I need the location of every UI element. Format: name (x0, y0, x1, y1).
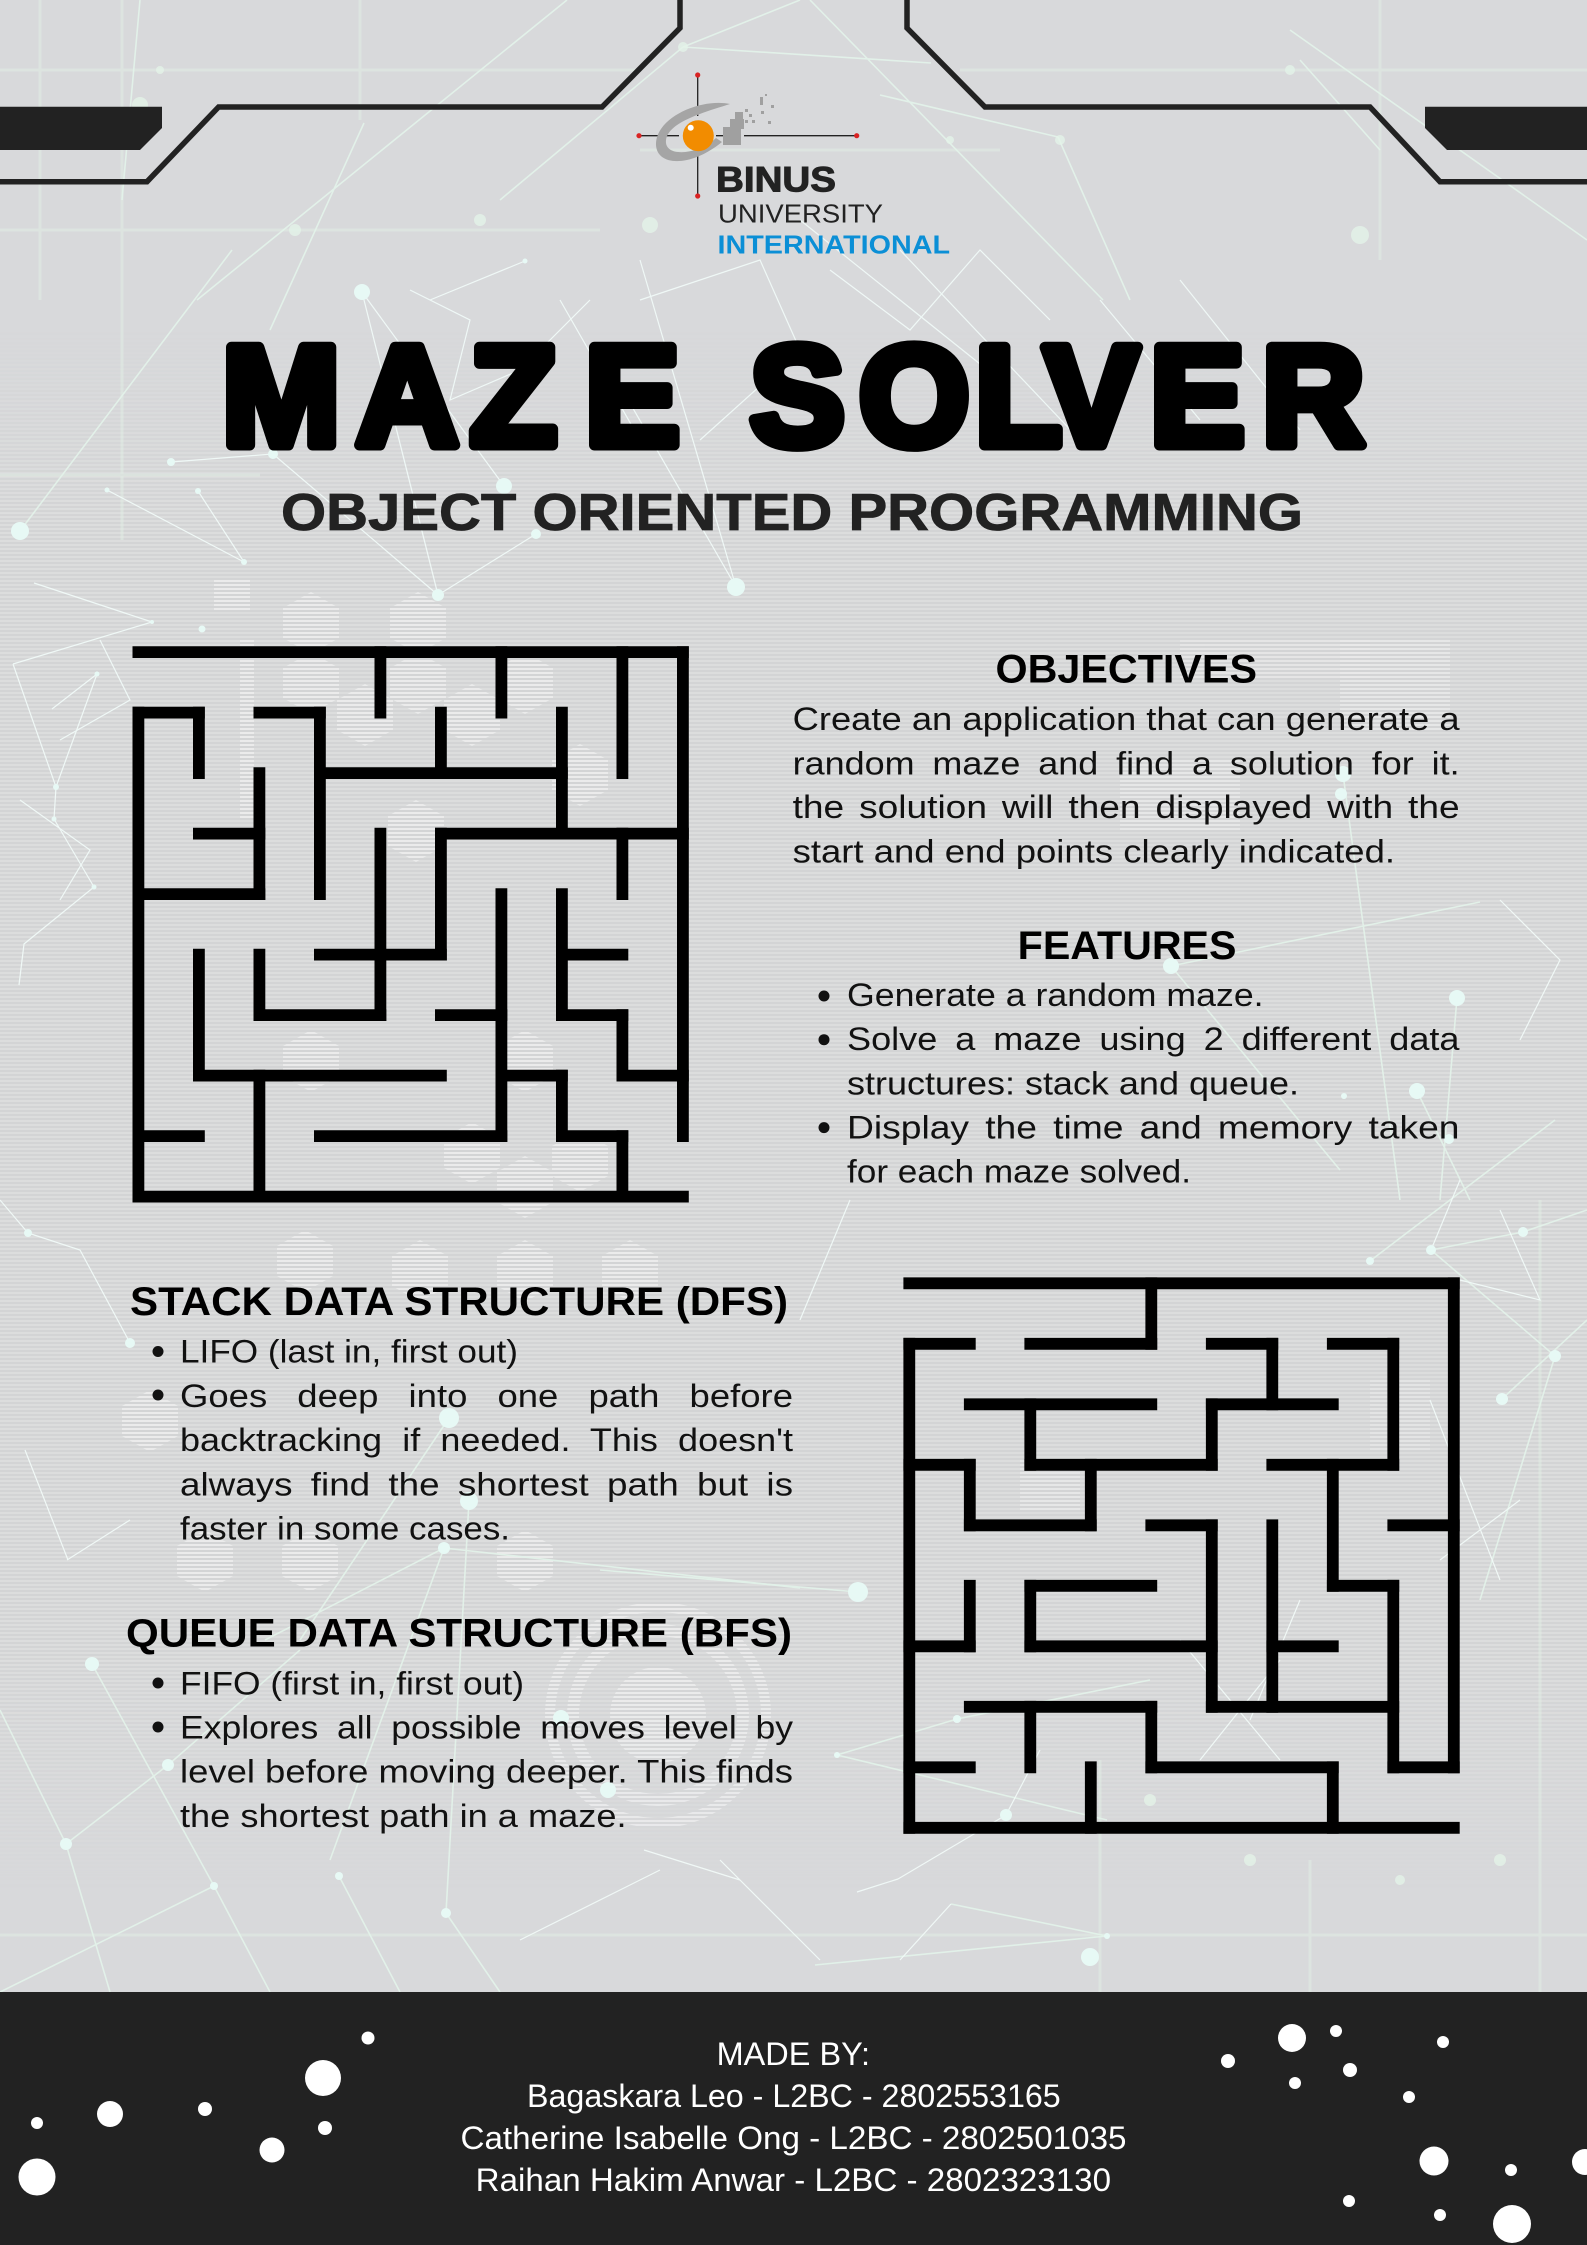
text block: objectives: start and end points clearly indicated. (793, 834, 1395, 870)
maze 2 (909, 1283, 1454, 1828)
top frame: right block (1425, 107, 1587, 150)
heading: objectives: OBJECTIVES (996, 648, 1257, 692)
logo text: BINUS (716, 161, 836, 200)
logo emblem (636, 72, 859, 199)
bullet list: stack (152, 1334, 793, 1546)
credits: Catherine Isabelle Ong - L2BC - 2802501035 (460, 2120, 1126, 2156)
bullet list: stack: always find the shortest path but is (180, 1466, 793, 1502)
maze 1 (138, 652, 683, 1197)
bullet list: stack: faster in some cases. (180, 1510, 510, 1546)
bullet list: queue: the shortest path in a maze. (180, 1798, 626, 1834)
footer dots: right (1221, 2024, 1587, 2243)
bullet list: features: structures: stack and queue. (847, 1066, 1299, 1102)
bullet list: features: Display the time and memory taken (847, 1110, 1460, 1146)
heading: stack: STACK DATA STRUCTURE (DFS) (130, 1280, 788, 1324)
text block: objectives: Create an application that can generate a (793, 701, 1460, 737)
subtitle: OBJECT ORIENTED PROGRAMMING (281, 484, 1303, 542)
bullet list: stack: LIFO (last in, first out) (180, 1334, 518, 1370)
bullet list: features: for each maze solved. (847, 1154, 1191, 1190)
logo: BINUS University International (636, 72, 950, 259)
logo text (716, 161, 950, 259)
bullet list: queue: Explores all possible moves level by (180, 1710, 793, 1746)
top frame: circuit lines (0, 0, 1587, 182)
credits: Raihan Hakim Anwar - L2BC - 2802323130 (476, 2162, 1111, 2198)
network nodes (11, 258, 1561, 1966)
panel: objectives (793, 648, 1460, 870)
logo text: UNIVERSITY (718, 199, 883, 229)
logo text: INTERNATIONAL (718, 229, 950, 259)
text block: objectives: the solution will then displayed with the (793, 789, 1460, 825)
top frame: left block (0, 107, 162, 150)
heading: features: FEATURES (1018, 924, 1236, 968)
title: MAZE SOLVER (222, 317, 1365, 476)
bullet list: features: Solve a maze using 2 different data (847, 1021, 1460, 1057)
bullet list: features (818, 977, 1460, 1190)
text block: objectives (793, 701, 1460, 870)
panel: features (818, 924, 1460, 1190)
text block: objectives: random maze and find a solution for it. (793, 746, 1460, 782)
credits (460, 2036, 1126, 2198)
bullet list: stack: Goes deep into one path before (180, 1378, 793, 1414)
bullet list: stack: backtracking if needed. This doesn't (180, 1422, 793, 1458)
panel: queue data structure (126, 1612, 793, 1834)
bullet list: queue: level before moving deeper. This finds (180, 1754, 793, 1790)
footer band (0, 1992, 1587, 2245)
bullet list: queue: FIFO (first in, first out) (180, 1666, 524, 1702)
footer dots: left (18, 2032, 374, 2196)
bullet list: features: Generate a random maze. (847, 977, 1264, 1013)
credits: MADE BY: (717, 2036, 870, 2072)
heading: queue: QUEUE DATA STRUCTURE (BFS) (126, 1612, 792, 1656)
credits: Bagaskara Leo - L2BC - 2802553165 (527, 2078, 1061, 2114)
panel: stack data structure (130, 1280, 793, 1546)
bullet list: queue (152, 1666, 793, 1834)
